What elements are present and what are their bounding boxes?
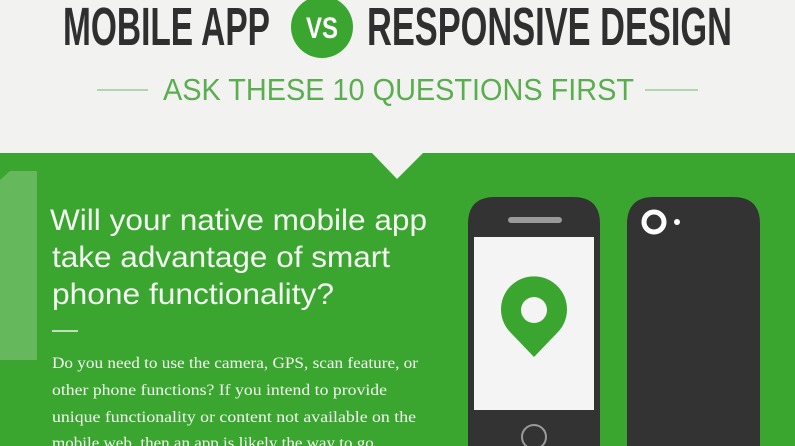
question heading: take advantage of smart [52,241,391,274]
question heading [50,204,427,311]
icon: vs badge: VS [306,12,338,45]
icon: location pin [501,276,567,357]
question heading: phone functionality? [52,278,334,311]
body text [52,355,419,446]
subtitle: ASK THESE 10 QUESTIONS FIRST [163,72,634,107]
question heading: Will your native mobile app [50,204,427,237]
body text: Do you need to use the camera, GPS, scan feature, or [52,355,419,372]
title [63,0,732,57]
icon: phone front [468,197,600,446]
big number 1 [0,171,37,360]
body text: other phone functions? If you intend to provide [52,382,387,399]
icon: vs badge [291,0,353,58]
panel: question 1 [0,153,795,446]
body text: unique functionality or content not available on the [52,409,416,426]
icon: phone back [627,197,760,446]
